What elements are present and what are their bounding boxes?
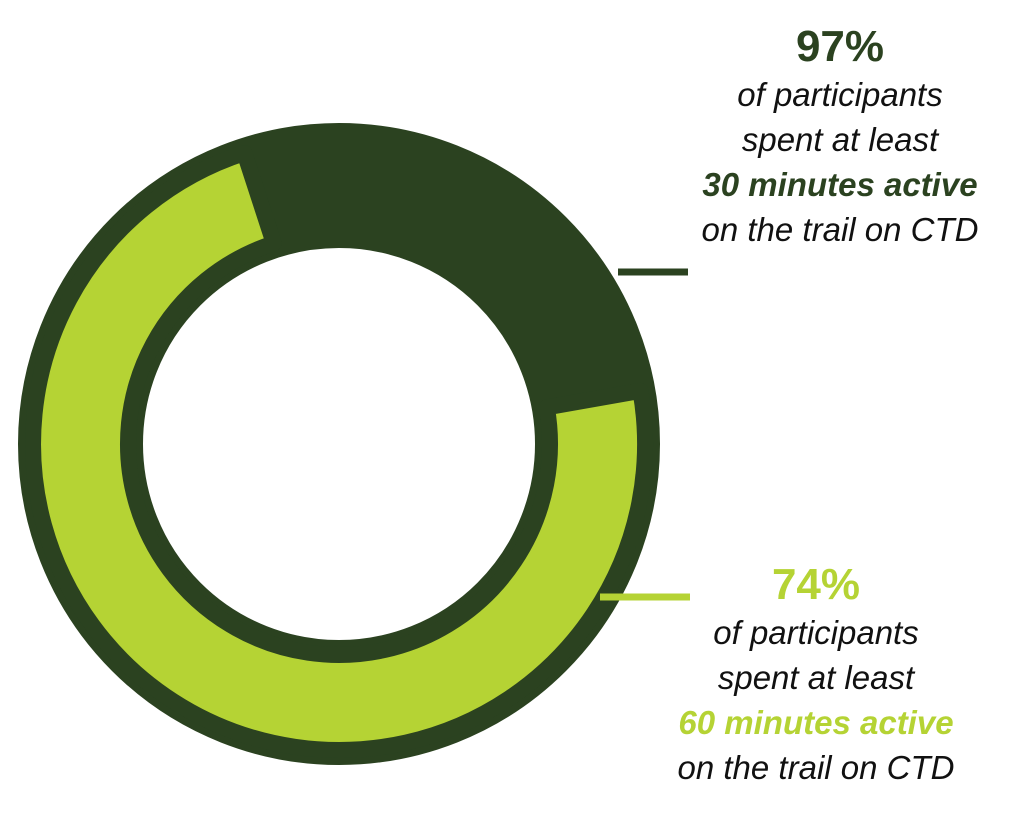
text block: 97%: spent at least <box>742 121 938 158</box>
text block: 97%: 30 minutes active <box>702 166 978 203</box>
connector line light <box>600 594 690 600</box>
text block: 97%: 97% <box>796 22 884 71</box>
connector line dark <box>618 268 688 276</box>
text block: 97%: on the trail on CTD <box>702 211 978 248</box>
dark segment: 30 minutes ring <box>80 186 598 702</box>
text block: 74%: of participants <box>713 614 919 651</box>
text block: 74%: on the trail on CTD <box>678 749 954 786</box>
text block: 74%: 74% <box>772 560 860 609</box>
text block: 74% <box>678 560 954 786</box>
text block: 74%: 60 minutes active <box>678 704 954 741</box>
light segment: 60 minutes arc <box>33 153 645 750</box>
text block: 97% <box>702 22 978 248</box>
text block: 74%: spent at least <box>718 659 914 696</box>
text block: 97%: of participants <box>737 76 943 113</box>
